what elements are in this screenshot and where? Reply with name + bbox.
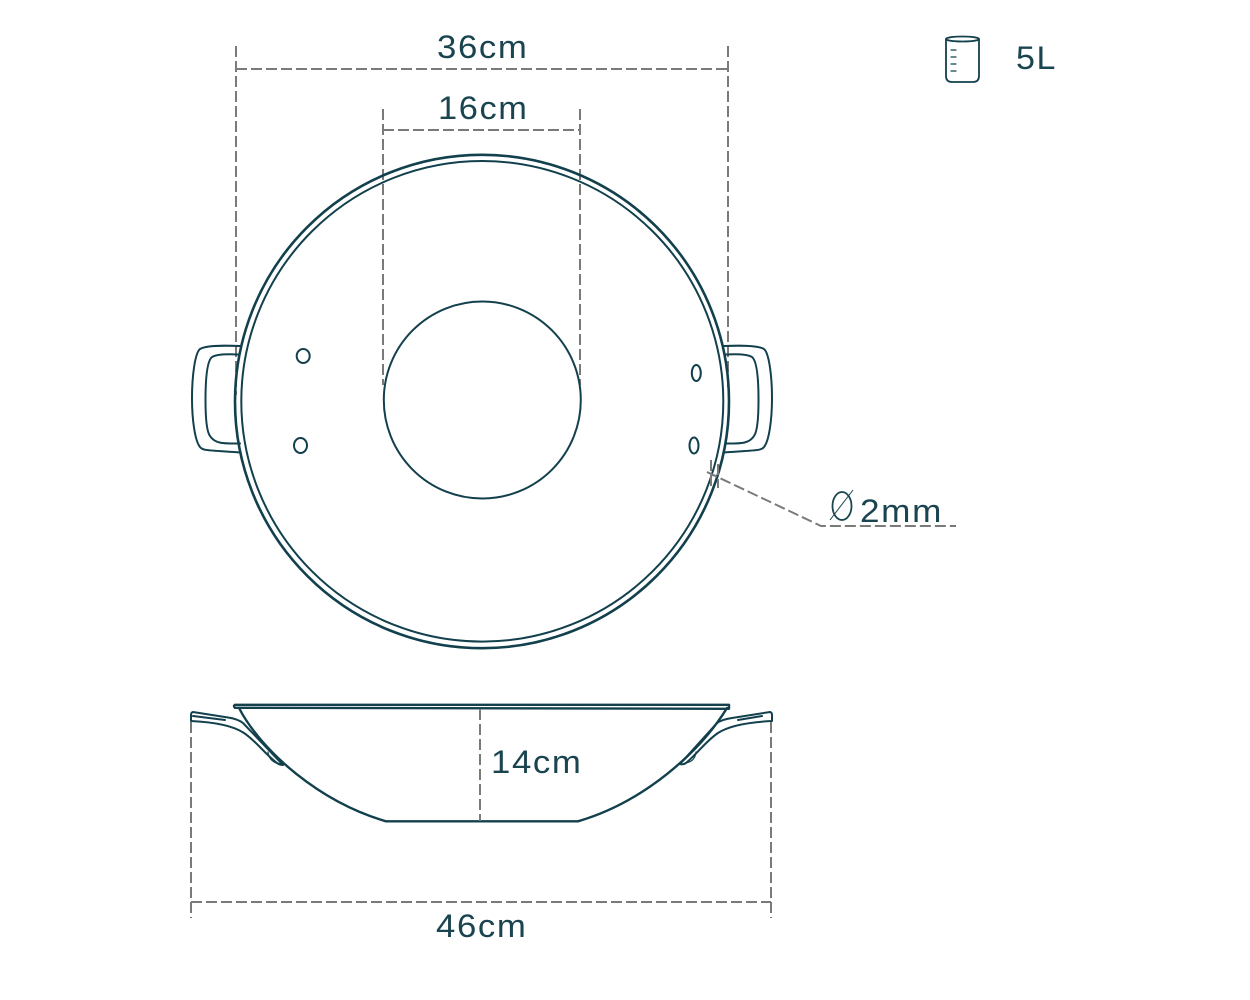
- pan side view: [191, 705, 772, 821]
- dimension: 46cm overall width: [191, 722, 771, 944]
- dimension: 46cm overall width: 46cm: [436, 908, 528, 944]
- outer rim: [235, 155, 729, 648]
- dimension: 16cm base diameter: 16cm: [438, 90, 528, 126]
- inner rim: [241, 161, 723, 642]
- dimension: 2mm thickness callout: [707, 460, 956, 529]
- capacity label: 5L: [1016, 40, 1057, 76]
- right handle: [724, 346, 772, 452]
- bowl: [239, 708, 727, 821]
- dimension: 36cm top diameter: [236, 29, 728, 395]
- dimension: 16cm base diameter: [383, 90, 580, 385]
- dimension: 14cm height: 14cm: [491, 744, 582, 780]
- dimension: 2mm thickness callout: 2mm: [860, 493, 943, 529]
- right rivets: [690, 365, 701, 454]
- left handle: [192, 346, 240, 452]
- left handle: [191, 712, 283, 765]
- diameter symbol: [830, 490, 853, 520]
- rim: [234, 705, 729, 709]
- right handle rivet: [685, 752, 696, 763]
- dimension: 36cm top diameter: 36cm: [437, 29, 528, 65]
- icon: measuring cup: [946, 36, 979, 82]
- right handle: [680, 712, 772, 764]
- left handle rivet: [268, 752, 280, 764]
- dimension: 14cm height: [480, 709, 582, 821]
- pan top view: [192, 155, 772, 648]
- left rivets: [294, 349, 310, 453]
- base circle: [384, 302, 581, 498]
